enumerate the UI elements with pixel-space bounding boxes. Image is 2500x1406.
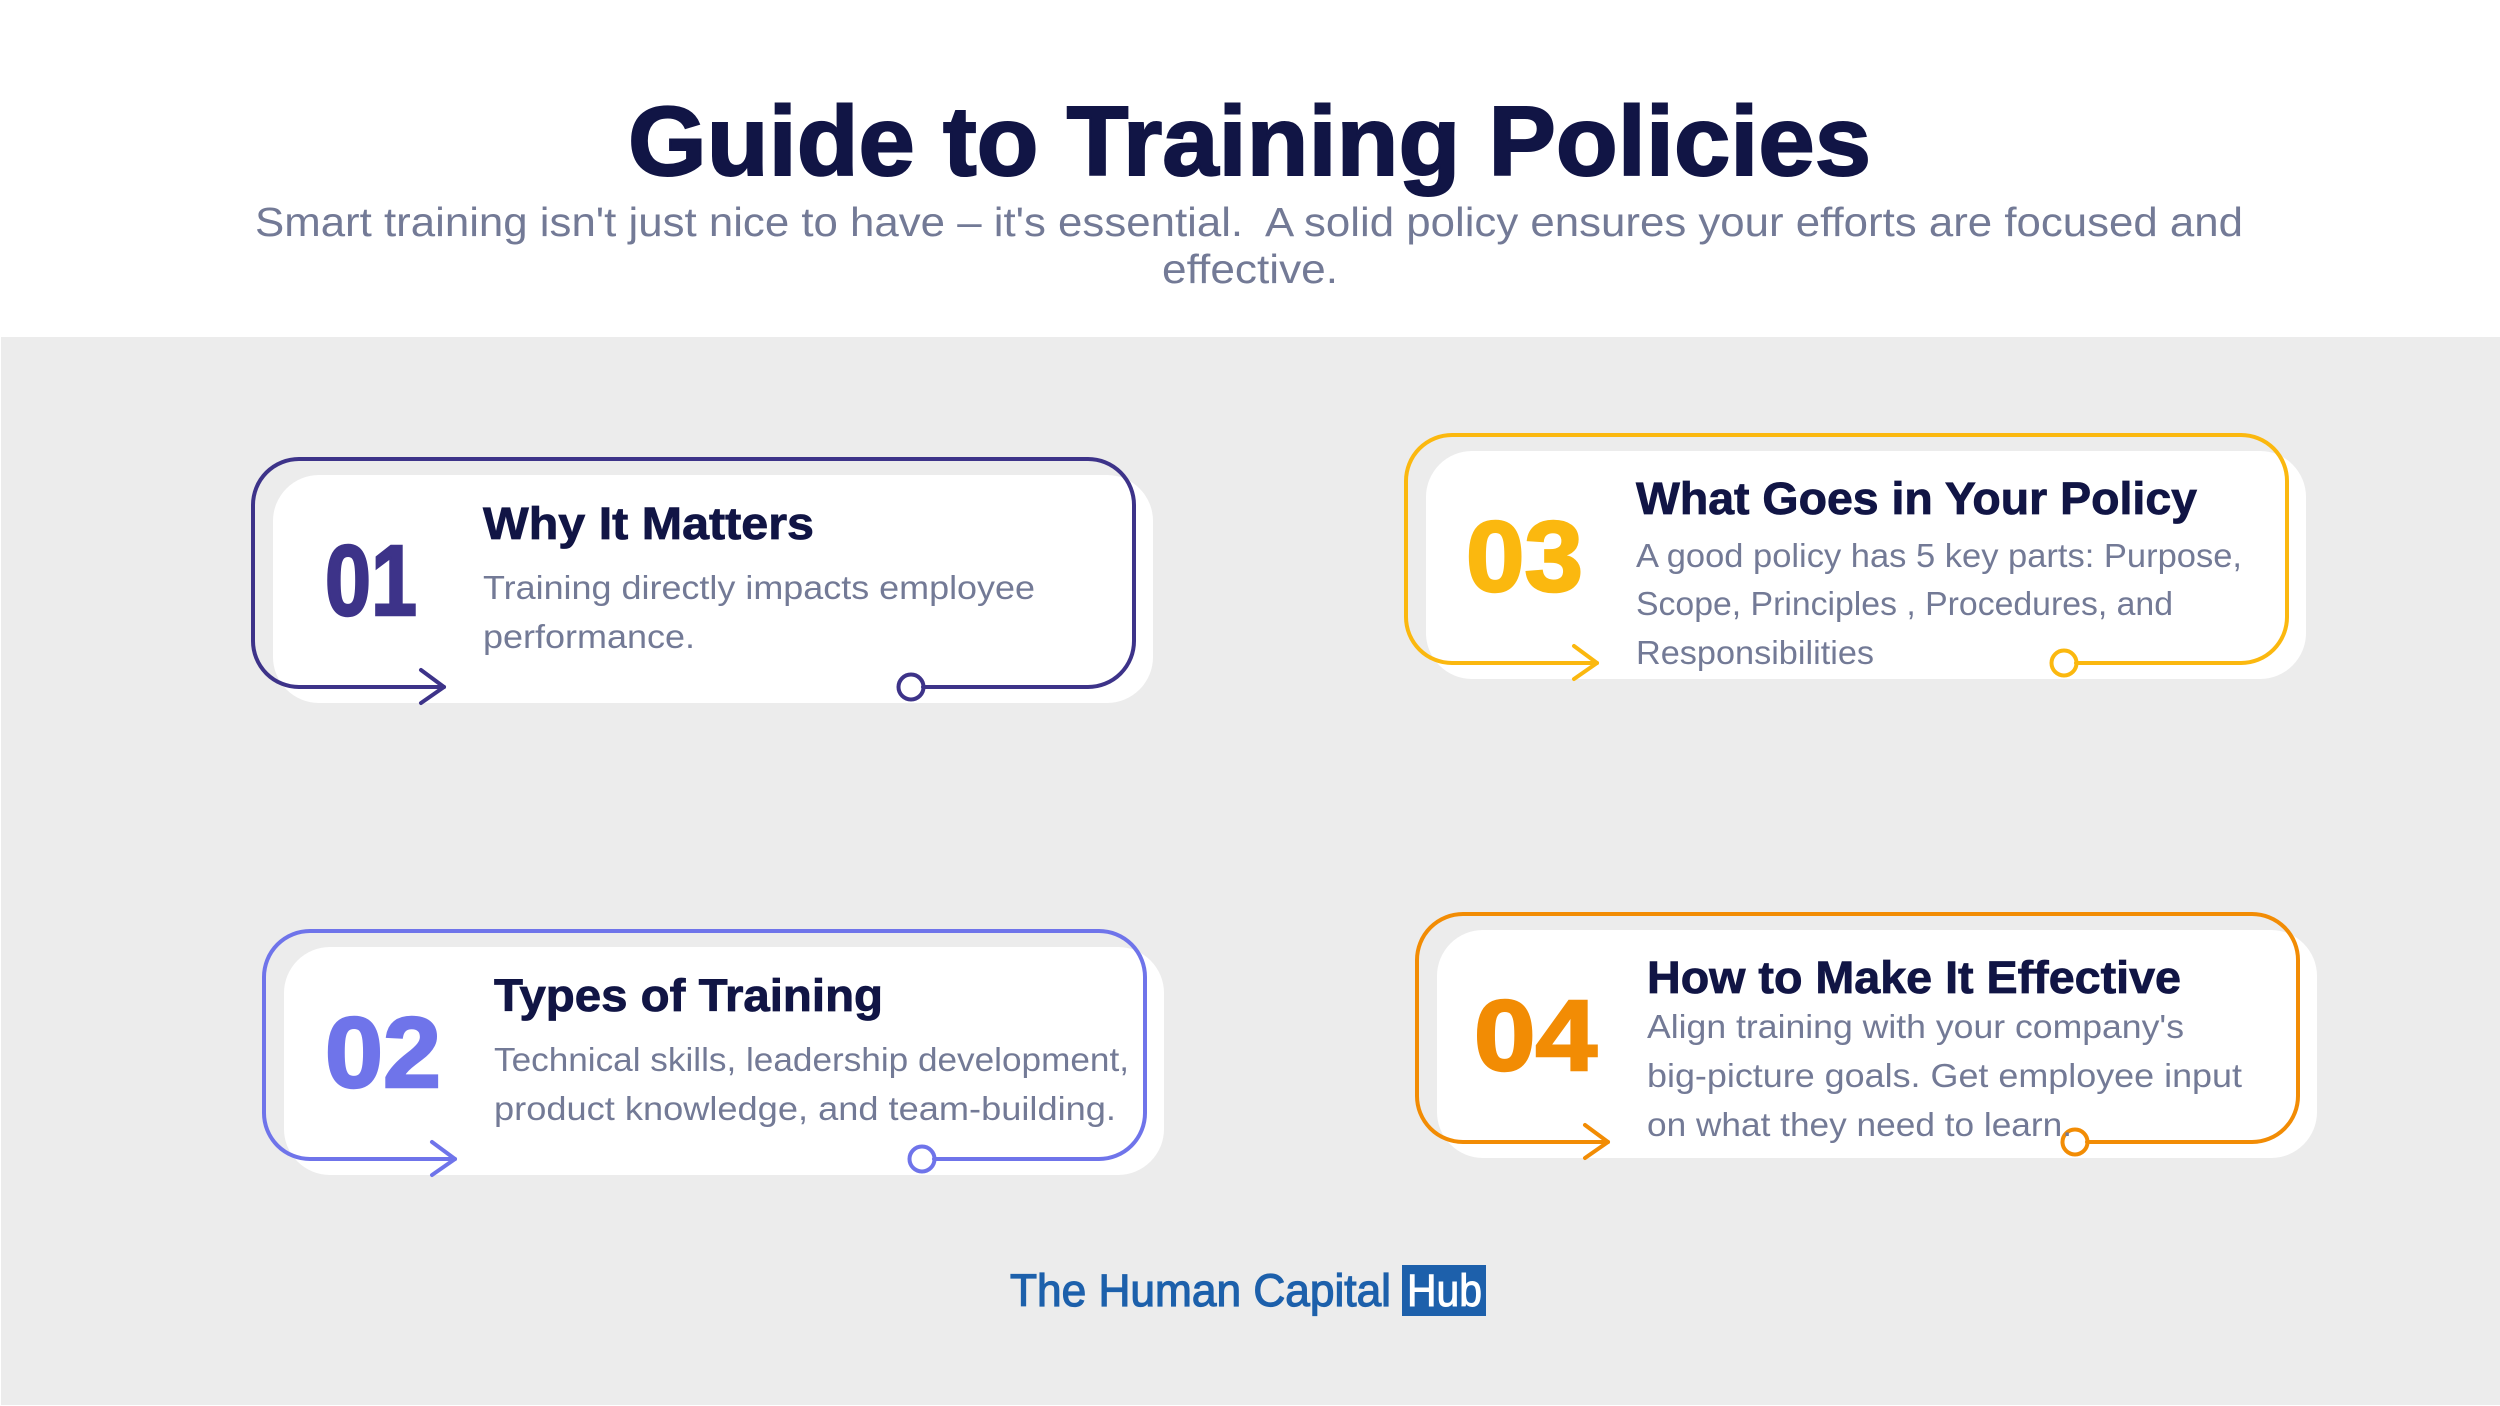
description 02 xyxy=(494,1041,1129,1127)
subtitle xyxy=(255,199,2243,292)
background panel xyxy=(1,337,2500,1405)
panel: 04 how to make it effective xyxy=(1417,914,2317,1158)
card background 03 xyxy=(1426,451,2306,679)
card background 04 xyxy=(1437,930,2317,1158)
number 04: 04 xyxy=(1474,980,1597,1092)
description 03 xyxy=(1636,537,2242,671)
subtitle: effective. xyxy=(1162,246,1338,292)
logo: The Human Capital Hub: Hub xyxy=(1407,1265,1482,1316)
outline and arrow 04 xyxy=(1417,914,2298,1158)
description 02: product knowledge, and team-building. xyxy=(494,1090,1116,1127)
outline and arrow 01 xyxy=(253,459,1134,703)
outline and arrow 02 xyxy=(264,931,1145,1175)
description 02: Technical skills, leadership development, xyxy=(494,1041,1129,1078)
heading 03: What Goes in Your Policy xyxy=(1636,473,2197,524)
panel: 03 what goes in your policy xyxy=(1406,435,2306,679)
description 03: A good policy has 5 key parts: Purpose, xyxy=(1636,537,2242,574)
outline and arrow 03 xyxy=(1406,435,2287,679)
subtitle: Smart training isn't just nice to have – it's essential. A solid policy ensures your efforts are focused and xyxy=(255,199,2243,245)
description 04 xyxy=(1647,1008,2242,1143)
panel: 02 types of training xyxy=(264,931,1164,1175)
description 01: Training directly impacts employee xyxy=(483,569,1035,606)
number 01: 01 xyxy=(325,525,417,637)
heading 02: Types of Training xyxy=(494,970,883,1021)
number 03: 03 xyxy=(1466,501,1583,613)
description 01 xyxy=(483,569,1035,655)
description 03: Scope, Principles , Procedures, and xyxy=(1636,585,2173,622)
description 04: on what they need to learn. xyxy=(1647,1106,2072,1143)
heading 01: Why It Matters xyxy=(483,498,814,549)
description 04: Align training with your company's xyxy=(1647,1008,2184,1045)
title: Guide to Training Policies xyxy=(628,86,1871,196)
logo: The Human Capital Hub: The Human Capital xyxy=(1010,1265,1391,1316)
heading 04: How to Make It Effective xyxy=(1647,952,2181,1003)
description 03: Responsibilities xyxy=(1636,634,1874,671)
card background 01 xyxy=(273,475,1153,703)
panel: 01 why it matters xyxy=(253,459,1153,703)
card background 02 xyxy=(284,947,1164,1175)
description 01: performance. xyxy=(483,618,695,655)
number 02: 02 xyxy=(325,997,441,1109)
description 04: big-picture goals. Get employee input xyxy=(1647,1057,2242,1094)
